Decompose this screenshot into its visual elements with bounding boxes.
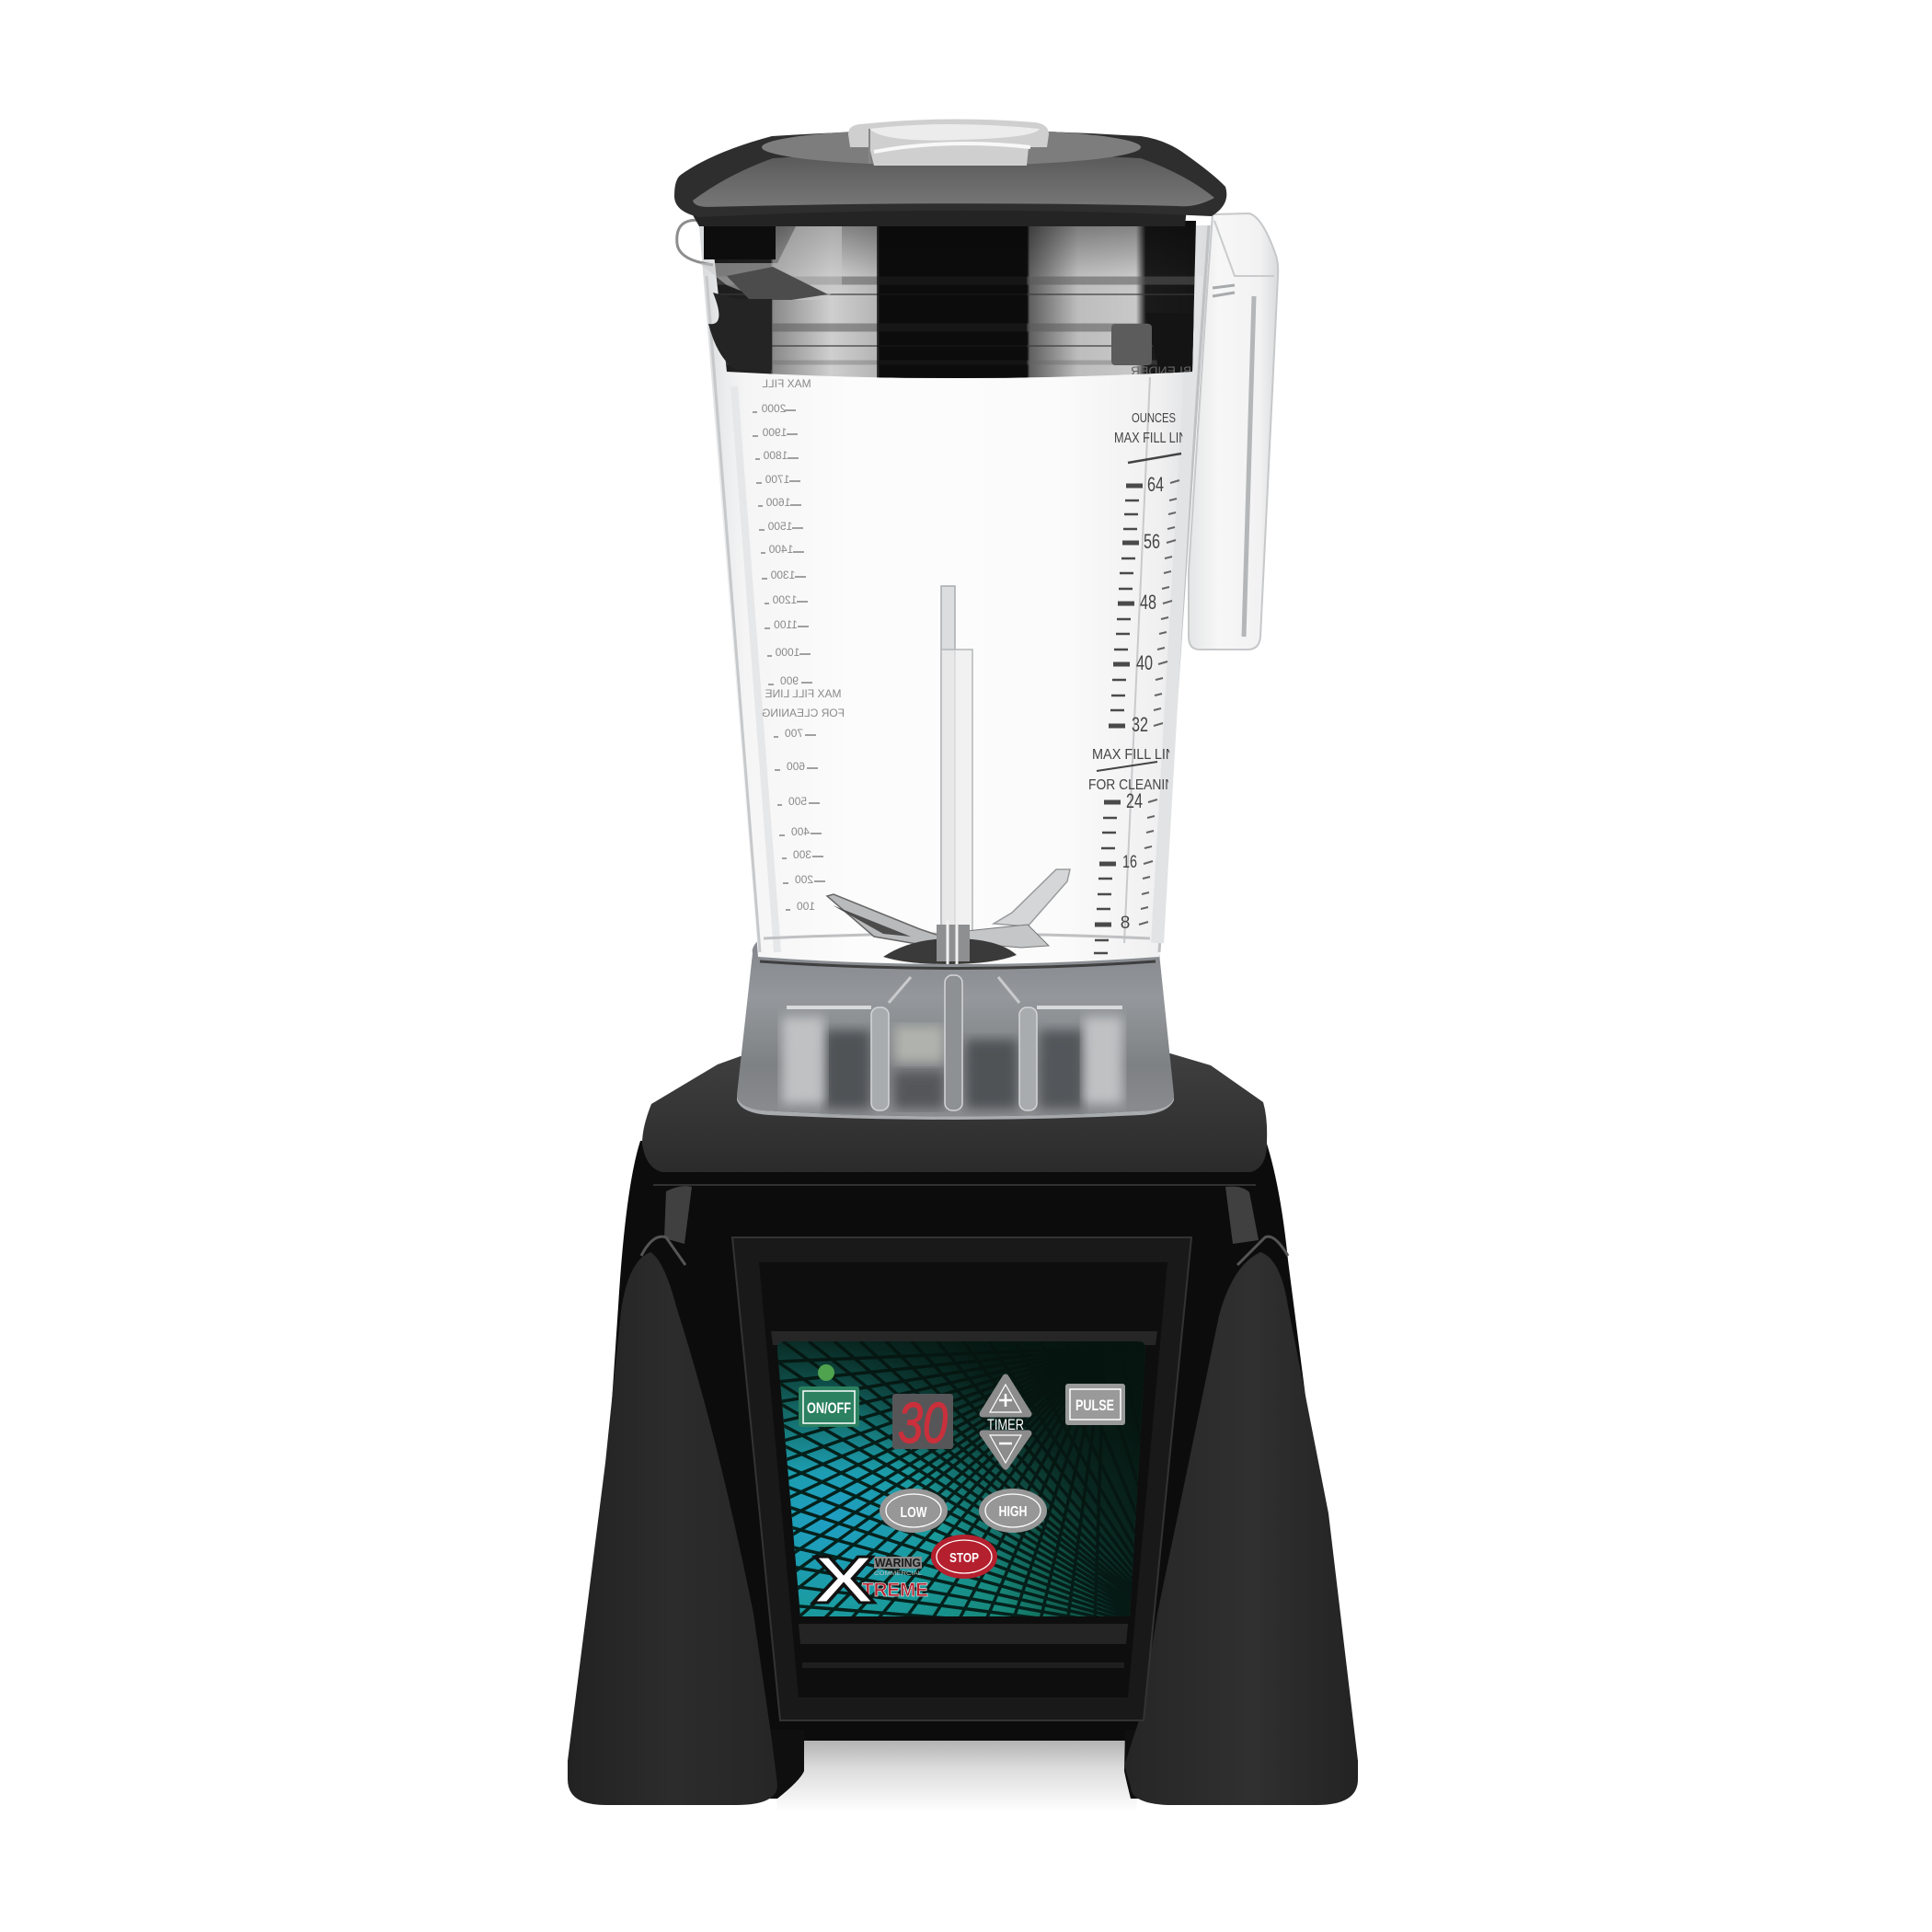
millilitre scale (seen through the jar, mirrored): 1700 — [765, 473, 789, 486]
ounces scale: OUNCES — [1132, 410, 1176, 426]
ounces scale: 32 — [1132, 713, 1148, 736]
jar body — [677, 220, 1211, 969]
jar base collar — [737, 938, 1174, 1120]
base top plate — [642, 1053, 1267, 1172]
ounces scale: 24 — [1126, 789, 1143, 812]
jar handle — [1189, 213, 1278, 650]
millilitre scale (seen through the jar, mirrored): 1500 — [767, 520, 792, 533]
right rubber foot — [1124, 1252, 1358, 1805]
waring commercial xtreme logo: TREME — [862, 1580, 928, 1601]
low button: LOW — [900, 1505, 927, 1521]
low button — [880, 1489, 948, 1533]
stop button: STOP — [949, 1550, 979, 1566]
ounces scale: 16 — [1122, 853, 1137, 872]
on/off button — [799, 1386, 859, 1427]
ounces scale: MAX FILL LINE — [1092, 747, 1184, 763]
ounces scale: 56 — [1144, 530, 1160, 553]
control panel display — [777, 1341, 1145, 1616]
millilitre scale (seen through the jar, mirrored): 1600 — [765, 496, 790, 509]
millilitre scale (seen through the jar, mirrored) — [753, 377, 845, 913]
timer down button — [983, 1433, 1029, 1466]
ounces scale: MAX FILL LINE — [1114, 431, 1195, 446]
ounces scale: 40 — [1136, 651, 1153, 674]
stop button — [931, 1535, 997, 1579]
mixing blade and shaft — [827, 586, 1070, 964]
millilitre scale (seen through the jar, mirrored): MAX FILL LINE — [765, 687, 841, 700]
ounces scale: 8 — [1121, 914, 1130, 933]
waring commercial xtreme logo: WARING — [875, 1556, 921, 1570]
timer display: 30 — [898, 1392, 948, 1455]
millilitre scale (seen through the jar, mirrored): 500 — [788, 795, 807, 808]
motor base body — [589, 1141, 1325, 1799]
inner sleeve: BLENDER — [1131, 363, 1191, 378]
millilitre scale (seen through the jar, mirrored): 1400 — [768, 543, 793, 556]
millilitre scale (seen through the jar, mirrored): 900 — [780, 674, 799, 687]
millilitre scale (seen through the jar, mirrored): 100 — [797, 900, 815, 913]
ounces scale: 48 — [1140, 591, 1156, 614]
millilitre scale (seen through the jar, mirrored): 1200 — [772, 593, 797, 606]
collar ribs — [871, 975, 1037, 1110]
timer up button — [983, 1377, 1029, 1414]
pulse button: PULSE — [1075, 1397, 1114, 1414]
product photo: commercial blender — [568, 120, 1358, 1805]
power LED — [818, 1364, 834, 1381]
millilitre scale (seen through the jar, mirrored): 1900 — [762, 426, 787, 439]
millilitre scale (seen through the jar, mirrored): MAX FILL — [762, 377, 811, 390]
left rubber foot — [568, 1252, 777, 1805]
millilitre scale (seen through the jar, mirrored): 200 — [795, 873, 813, 886]
millilitre scale (seen through the jar, mirrored): 1100 — [774, 618, 798, 631]
waring commercial xtreme logo: X — [812, 1544, 875, 1617]
ounces scale: 64 — [1147, 473, 1164, 496]
lid recess — [762, 129, 1141, 166]
millilitre scale (seen through the jar, mirrored): 400 — [791, 825, 810, 838]
ounces scale: FOR CLEANING — [1088, 777, 1184, 793]
gloss highlights — [664, 1186, 692, 1244]
ounces scale — [1089, 413, 1183, 955]
lid — [674, 119, 1226, 226]
control panel housing — [732, 1237, 1191, 1720]
timer label: TIMER — [987, 1416, 1024, 1433]
millilitre scale (seen through the jar, mirrored): 700 — [785, 727, 803, 740]
waring commercial xtreme logo — [812, 1544, 928, 1617]
floor shadow — [773, 1734, 1141, 1812]
high button — [979, 1489, 1047, 1533]
inner sleeve — [710, 221, 1196, 386]
millilitre scale (seen through the jar, mirrored): FOR CLEANING — [762, 707, 845, 719]
millilitre scale (seen through the jar, mirrored): 2000 — [761, 402, 786, 415]
waring commercial xtreme logo: COMMERCIAL — [874, 1570, 922, 1577]
high button: HIGH — [999, 1504, 1027, 1520]
millilitre scale (seen through the jar, mirrored): 1800 — [763, 449, 788, 462]
clear lid plug — [848, 119, 1049, 166]
millilitre scale (seen through the jar, mirrored): 1300 — [770, 569, 795, 581]
lattice background — [777, 1341, 1145, 1616]
pulse button — [1065, 1384, 1125, 1425]
jar spout — [677, 220, 842, 370]
millilitre scale (seen through the jar, mirrored): 600 — [787, 760, 805, 773]
millilitre scale (seen through the jar, mirrored): 1000 — [775, 646, 799, 659]
millilitre scale (seen through the jar, mirrored): 300 — [793, 848, 811, 861]
on/off button: ON/OFF — [807, 1399, 851, 1417]
